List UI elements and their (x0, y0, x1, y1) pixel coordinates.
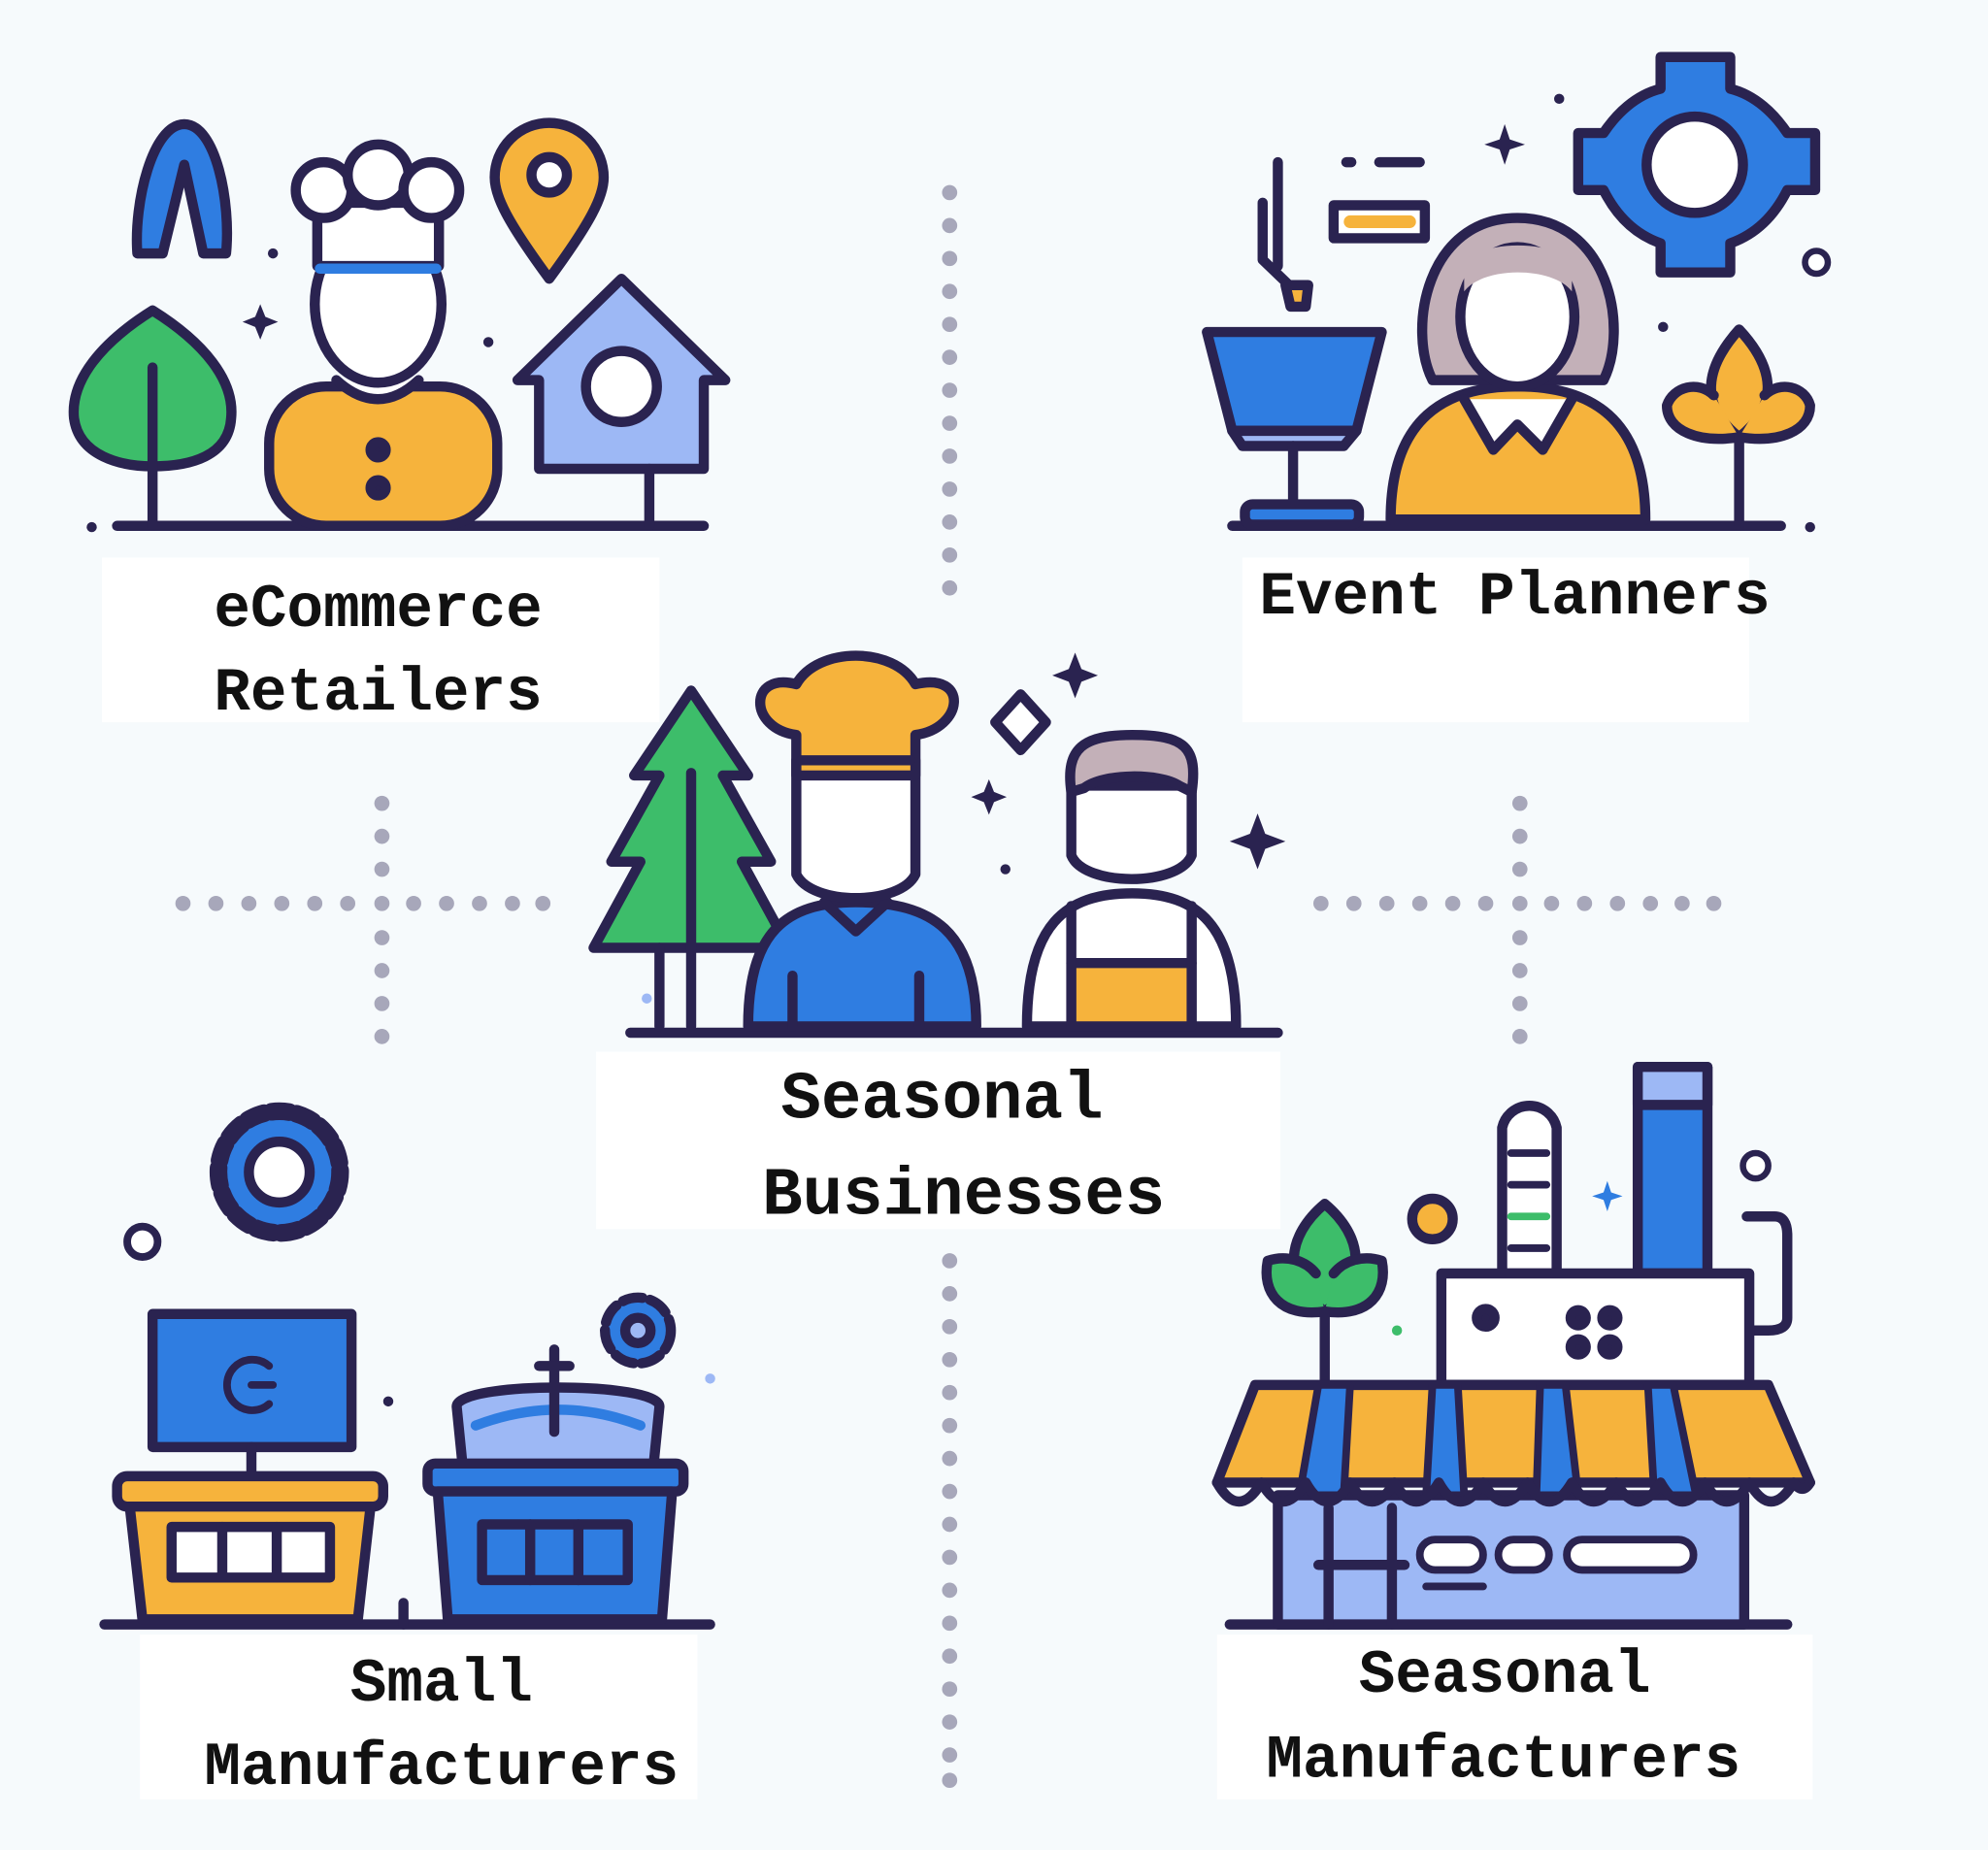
label: eCommerce Retailers: Retailers (214, 659, 543, 728)
label: Seasonal Manufacturers: Manufacturers (1266, 1726, 1740, 1795)
label: Seasonal Businesses: Businesses (762, 1158, 1165, 1235)
label: Seasonal Manufacturers: Seasonal (1359, 1641, 1651, 1710)
label: Seasonal Businesses: Seasonal (780, 1061, 1104, 1138)
label: Event Planners: Event Planners (1259, 563, 1771, 632)
dotted dividers (176, 185, 1721, 1788)
icon: seasonal manufacturers scene (1217, 1067, 1810, 1625)
icon: eCommerce retailers scene (74, 123, 725, 532)
icon: seasonal businesses scene (593, 652, 1285, 1033)
icon: event planners scene (1207, 57, 1828, 532)
label backgrounds (102, 557, 1812, 1800)
icon: small manufacturers scene (105, 1111, 715, 1625)
label: Small Manufacturers: Small (350, 1650, 533, 1719)
label: eCommerce Retailers: eCommerce (214, 576, 543, 644)
label: Small Manufacturers: Manufacturers (204, 1734, 679, 1802)
label: Seasonal Businesses (762, 1061, 1165, 1235)
label: Seasonal Manufacturers (1266, 1641, 1740, 1795)
label: Small Manufacturers (204, 1650, 679, 1802)
label: eCommerce Retailers (214, 576, 543, 728)
